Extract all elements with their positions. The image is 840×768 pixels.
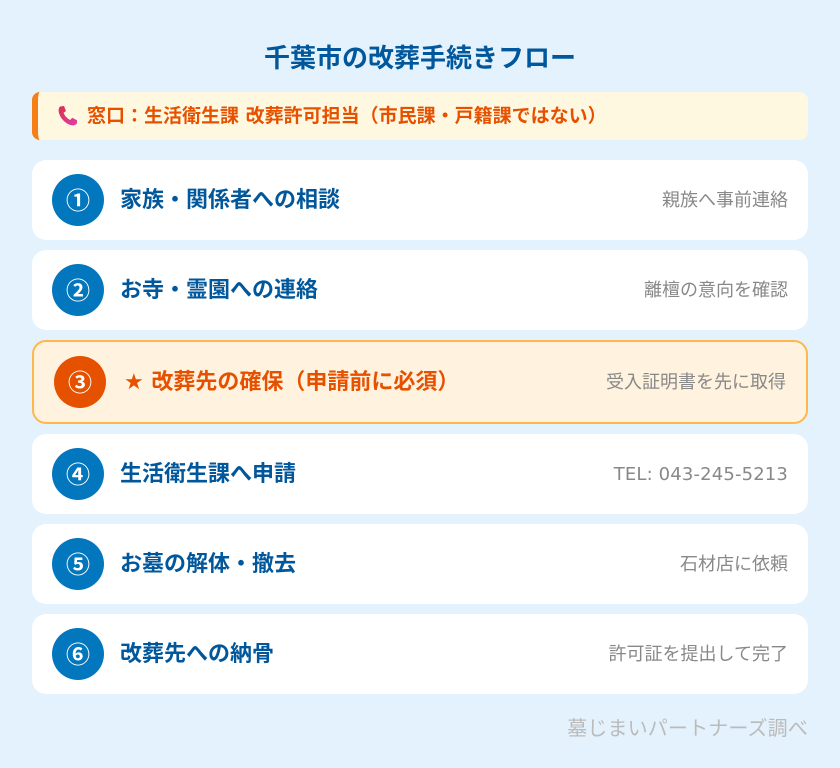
step 3 highlighted (32, 340, 808, 424)
step number 4 (52, 448, 104, 500)
step 5 (32, 524, 808, 604)
step number 6 (52, 628, 104, 680)
step number 5: ⑤ (66, 545, 90, 580)
step 1 label: 家族・関係者への相談 (120, 188, 340, 213)
step number 5 (52, 538, 104, 590)
step 4 note: TEL: 043-245-5213 (614, 464, 788, 485)
source footer: 墓じまいパートナーズ調べ (567, 716, 808, 740)
step 6 label: 改葬先への納骨 (120, 642, 274, 667)
step number 1: ① (66, 181, 90, 216)
step 4 label: 生活衛生課へ申請 (120, 462, 296, 487)
step number 3 (54, 356, 106, 408)
step 5 note: 石材店に依頼 (680, 554, 788, 575)
step 6 (32, 614, 808, 694)
icon: telephone (58, 106, 77, 126)
callout: contact window (32, 92, 808, 140)
step number 2 (52, 264, 104, 316)
step number 2: ② (66, 271, 90, 306)
callout text: 窓口：生活衛生課 改葬許可担当（市民課・戸籍課ではない） (87, 105, 607, 127)
step 1 note: 親族へ事前連絡 (662, 190, 788, 211)
step number 1 (52, 174, 104, 226)
step number 4: ④ (66, 455, 90, 490)
step 2 label: お寺・霊園への連絡 (120, 278, 318, 303)
step 3 label: ★ 改葬先の確保（申請前に必須） (124, 370, 459, 395)
title: 千葉市の改葬手続きフロー (264, 44, 576, 74)
step 3 note: 受入証明書を先に取得 (606, 372, 786, 393)
step 1 (32, 160, 808, 240)
step 5 label: お墓の解体・撤去 (120, 552, 296, 577)
step 2 (32, 250, 808, 330)
step number 6: ⑥ (66, 635, 90, 670)
step 2 note: 離檀の意向を確認 (644, 280, 788, 301)
step 6 note: 許可証を提出して完了 (609, 644, 788, 665)
step number 3: ③ (68, 363, 92, 398)
step 4 (32, 434, 808, 514)
